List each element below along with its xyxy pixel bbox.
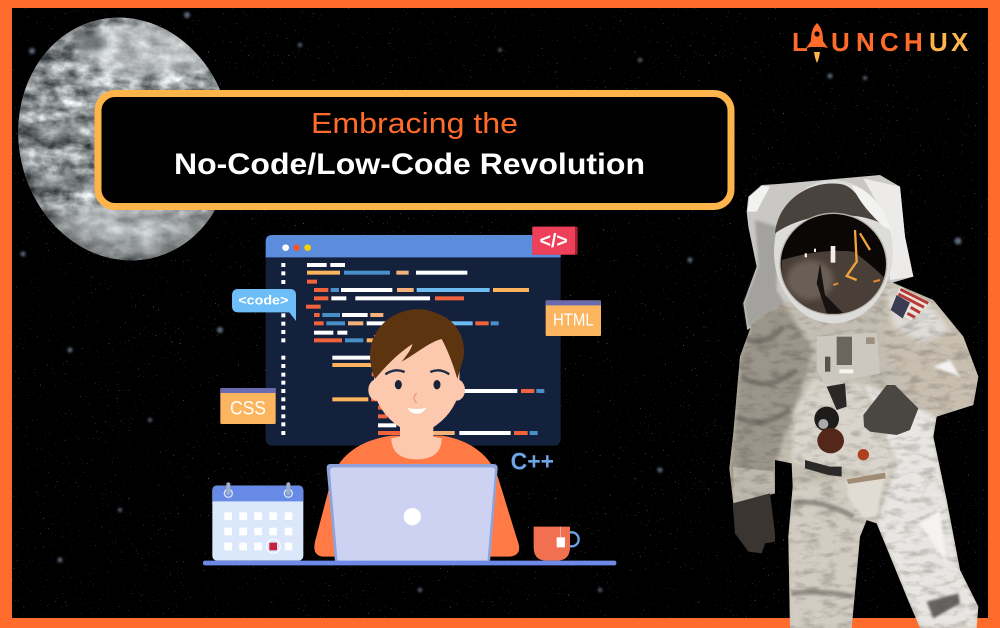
helmet [774,180,893,323]
logo: LaunchUX: UNCH [831,27,923,57]
suit body [720,280,983,628]
right glove [863,385,918,435]
orange shirt [314,436,519,557]
coffee mug [534,527,579,561]
hair [370,309,464,379]
visor reflection [777,210,890,317]
title line 2: No-Code/Low-Code Revolution [174,148,645,181]
ears [368,379,385,401]
backpack [743,175,913,330]
left glove [733,493,775,553]
logo: LaunchUX: UX [929,27,969,57]
eyes [395,380,402,389]
nose [414,393,417,403]
laptop [327,464,498,562]
smile [407,408,426,414]
line number dots [281,263,285,435]
chest connectors [814,383,869,460]
CSS card: CSS [230,398,266,419]
HTML card [546,300,601,336]
red code tag [532,227,578,255]
CSS card [220,388,276,424]
code speech bubble: <code> [238,293,289,308]
C++ label: C++ [511,449,554,476]
title box [98,94,731,206]
icon: rocket [806,23,828,63]
neck and collar [391,422,442,459]
logo: LaunchUX [792,23,969,63]
code speech bubble [232,289,296,321]
logo: LaunchUX: L [792,27,808,57]
earth planet [18,18,220,260]
person [314,309,519,557]
code lines [306,263,544,435]
HTML card: HTML [553,310,594,330]
red code tag: </> [540,231,568,252]
desk line [203,561,616,565]
face [374,335,460,432]
flag patch [891,287,931,321]
developer illustration [203,227,616,565]
eyebrows [385,370,405,374]
calendar [212,482,303,561]
code window [266,235,561,446]
chest control unit [817,333,880,384]
astronaut [720,175,983,628]
title line 1: Embracing the [311,108,518,140]
